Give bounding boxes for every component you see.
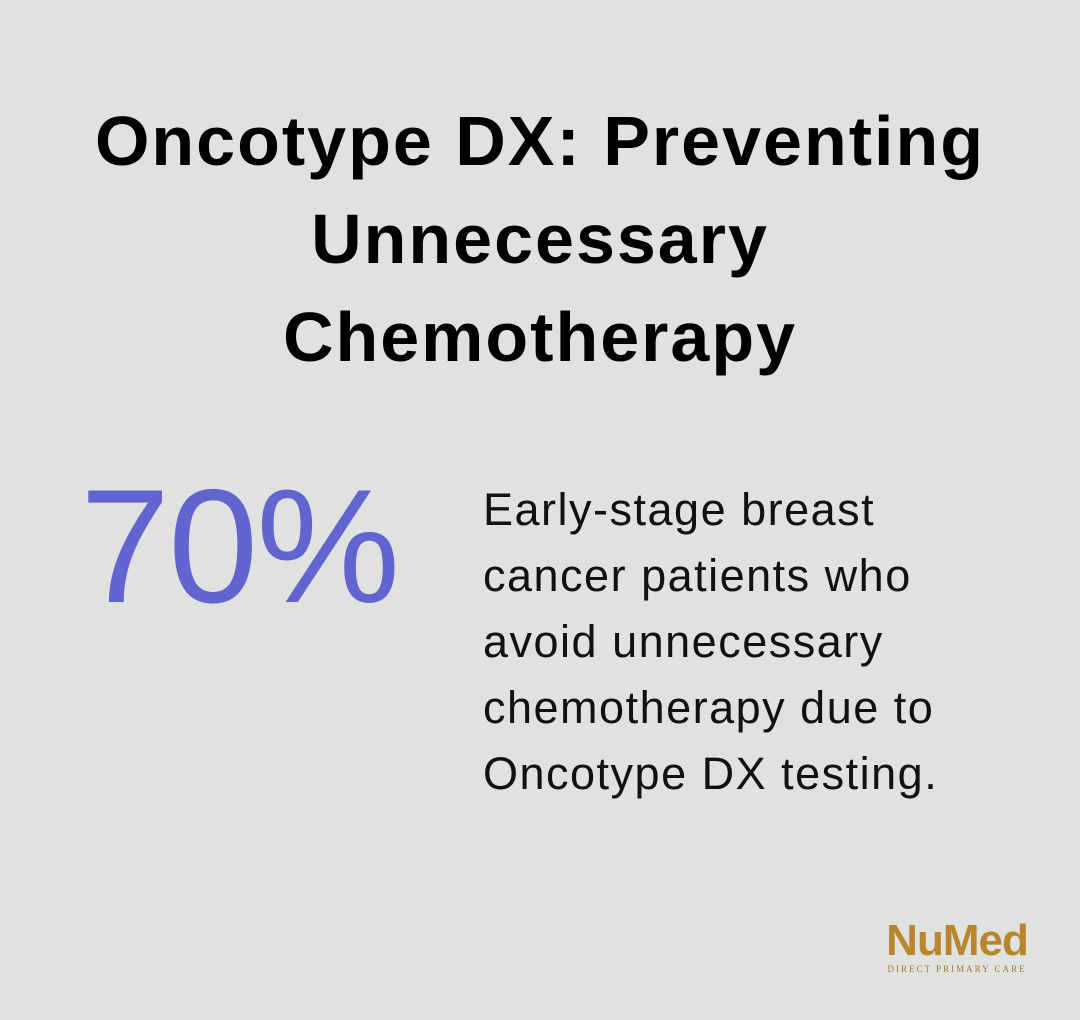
description text: avoid unnecessary (483, 616, 884, 667)
title: Chemotherapy (283, 298, 797, 376)
stat number: 70% (80, 456, 398, 637)
description text (483, 484, 938, 799)
description text: Early-stage breast (483, 484, 875, 535)
description text: Oncotype DX testing. (483, 748, 938, 799)
logo: DIRECT PRIMARY CARE (887, 964, 1027, 974)
title: Unnecessary (311, 200, 769, 278)
description text: chemotherapy due to (483, 682, 934, 733)
title: Oncotype DX: Preventing (95, 102, 985, 180)
logo: NuMed (886, 916, 1028, 965)
title (95, 102, 985, 376)
description text: cancer patients who (483, 550, 912, 601)
